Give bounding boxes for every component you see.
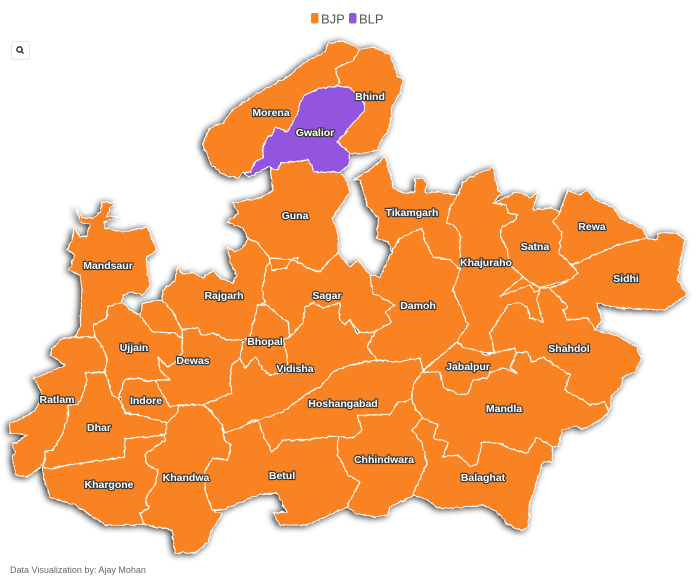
district labels: Bhind [355, 91, 385, 103]
icon: magnifier [17, 47, 24, 54]
district: Khajuraho [447, 168, 543, 353]
credit line: Data Visualization by: Ajay Mohan [10, 565, 146, 575]
district: Mandsaur [67, 202, 157, 337]
district: Sagar [258, 253, 395, 337]
district labels: Chhindwara [354, 454, 414, 466]
district labels: Guna [282, 210, 309, 222]
district: Tikamgarh [353, 157, 460, 270]
district labels: Vidisha [276, 363, 314, 375]
district: Sidhi [550, 233, 687, 330]
district labels: Jabalpur [446, 361, 490, 373]
district labels: Rewa [578, 221, 606, 233]
district labels: Balaghat [461, 472, 506, 484]
district labels: Ratlam [39, 394, 75, 406]
district labels: Morena [252, 107, 290, 119]
district labels: Khajuraho [460, 257, 512, 269]
district: Bhind [335, 47, 403, 154]
district labels: Mandsaur [83, 260, 133, 272]
district: Indore [118, 378, 178, 423]
district: Morena [203, 41, 360, 178]
district: Dewas [155, 328, 243, 407]
zoom button [12, 42, 30, 60]
district: Khargone [43, 435, 165, 525]
district labels: Dewas [176, 355, 210, 367]
district: Dhar [43, 372, 167, 469]
district labels: Khandwa [163, 472, 209, 484]
district labels: Ujjain [120, 342, 148, 354]
district labels: Bhopal [247, 336, 283, 348]
district: Mandla [412, 352, 609, 466]
district labels: Dhar [87, 422, 111, 434]
district labels: Satna [521, 241, 549, 253]
district: Shahdol [490, 288, 642, 412]
district labels: Hoshangabad [308, 398, 378, 410]
district: Damoh [367, 228, 468, 370]
district labels: Sidhi [613, 273, 639, 285]
gap fill: Khajuraho and Satna border [496, 273, 556, 300]
legend [311, 12, 384, 26]
district: Vidisha [203, 303, 377, 433]
gap fill: Guna and Sagar border [264, 254, 302, 274]
district labels: Sagar [312, 290, 342, 302]
district labels: Mandla [486, 403, 522, 415]
district: Betul [205, 420, 360, 525]
district: Chhindwara [338, 399, 427, 517]
legend label: BLP: BLP [359, 12, 384, 26]
district: Rajgarh [162, 239, 270, 340]
district: Satna [493, 192, 578, 288]
district: Ratlam [10, 337, 107, 477]
district: Balaghat [412, 418, 553, 531]
district labels [39, 91, 639, 491]
district labels: Damoh [400, 300, 436, 312]
legend label: BJP: BJP [321, 12, 345, 26]
district: Gwalior (BLP) [243, 86, 365, 177]
district: Rewa [553, 190, 647, 265]
district labels: Khargone [84, 479, 134, 491]
district: Ujjain [93, 302, 182, 398]
district labels: Rajgarh [204, 290, 244, 302]
district: Hoshangabad [258, 358, 423, 452]
district labels: Gwalior [296, 127, 334, 139]
district labels: Indore [130, 395, 162, 407]
legend swatch: BJP [311, 13, 318, 24]
district: Khandwa [140, 405, 231, 553]
district: Shajapur [140, 300, 182, 338]
district: Jabalpur [422, 342, 517, 395]
district labels: Tikamgarh [386, 207, 438, 219]
district: Guna [227, 160, 350, 272]
district: Bhopal [240, 305, 290, 375]
district labels: Betul [269, 470, 295, 482]
legend swatch: BLP [349, 13, 356, 24]
district labels: Shahdol [548, 343, 590, 355]
